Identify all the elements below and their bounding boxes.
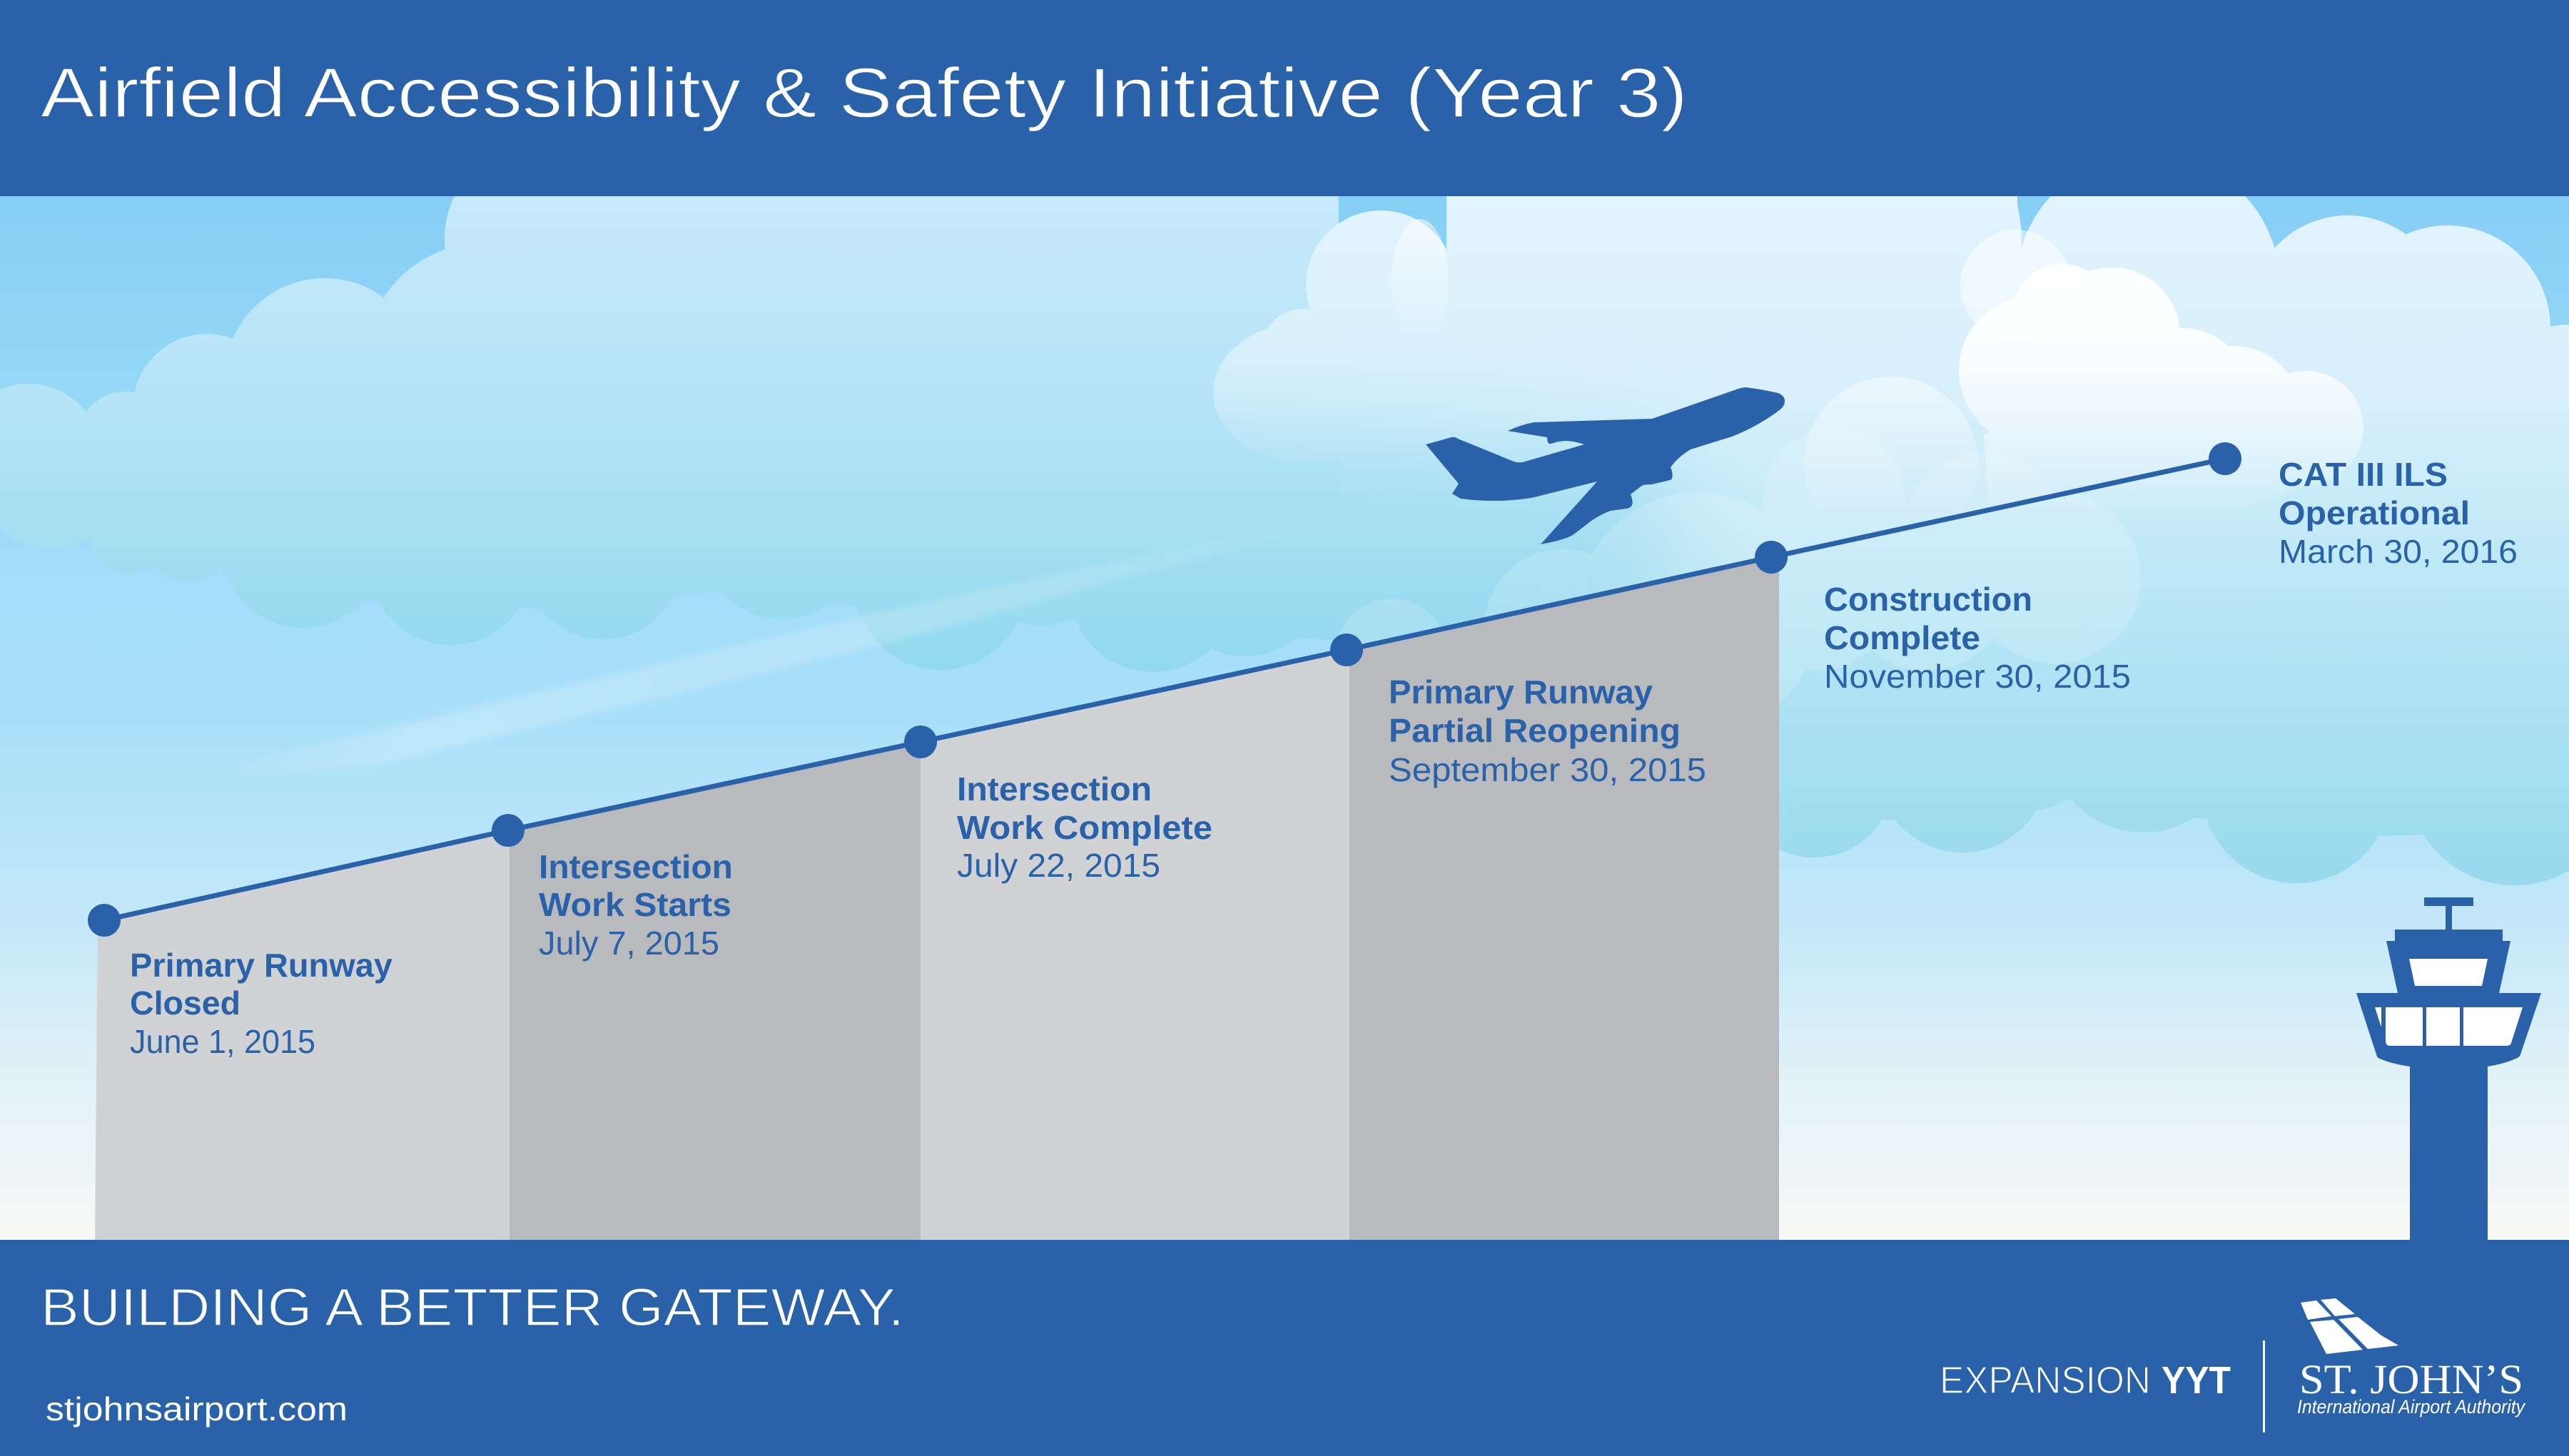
milestone: Intersection Work Starts xyxy=(539,848,733,962)
logo: St. John's airport authority: International Airport Authority xyxy=(2297,1396,2525,1417)
cloud: large right xyxy=(1213,196,2569,885)
logo: St. John's airport authority: ST. JOHN’S xyxy=(2299,1356,2523,1402)
milestone: Primary Runway Closed: Primary Runway xyxy=(130,947,392,984)
milestone: Construction Complete: Construction xyxy=(1824,581,2032,618)
sky background xyxy=(0,196,2569,1240)
cloud: white front xyxy=(1959,264,2363,494)
timeline line xyxy=(104,459,2225,920)
airplane silhouette xyxy=(1426,387,1785,544)
column 1 xyxy=(95,830,510,1240)
milestone: CAT III ILS Operational xyxy=(2279,456,2518,570)
control tower xyxy=(2356,897,2541,1240)
column 3 xyxy=(921,650,1349,1240)
cloud: translucent lower xyxy=(1334,428,2141,735)
milestone: CAT III ILS Operational: March 30, 2016 xyxy=(2279,533,2518,570)
website: stjohnsairport.com xyxy=(46,1390,348,1427)
logo: Expansion YYT: EXPANSION xyxy=(1940,1359,2151,1402)
footer band xyxy=(0,1240,2569,1456)
timeline xyxy=(88,442,2241,937)
milestone: Construction Complete: Complete xyxy=(1824,619,1980,656)
tagline: BUILDING A BETTER GATEWAY. xyxy=(41,1278,904,1337)
milestone: Intersection Work Complete: July 22, 2015 xyxy=(957,847,1160,884)
logo divider xyxy=(2263,1340,2265,1432)
columns under timeline xyxy=(95,556,1779,1240)
milestone: Construction Complete: November 30, 2015 xyxy=(1824,658,2131,695)
milestone: Primary Runway Closed xyxy=(130,947,392,1060)
milestone: Primary Runway Partial Reopening: September 30, 2015 xyxy=(1389,751,1706,788)
logo: St. John's airport authority xyxy=(2297,1298,2525,1417)
milestone: Primary Runway Partial Reopening: Partial Reopening xyxy=(1389,712,1681,749)
cloud highlight: top lobe xyxy=(1392,219,1449,345)
icon: runway xyxy=(2301,1298,2398,1354)
column 2 xyxy=(510,742,921,1240)
milestone: Intersection Work Complete: Intersection xyxy=(957,770,1152,808)
milestone dots xyxy=(88,442,2241,937)
milestone: CAT III ILS Operational: Operational xyxy=(2279,494,2470,531)
milestone: Primary Runway Closed: June 1, 2015 xyxy=(130,1023,315,1060)
tower body xyxy=(2356,897,2541,1240)
milestone: Intersection Work Complete xyxy=(957,770,1212,884)
header band xyxy=(0,0,2569,196)
milestone: Primary Runway Closed: Closed xyxy=(130,984,240,1022)
cloud: white soft upper lobe xyxy=(1960,230,2072,341)
milestone: Intersection Work Starts: Work Starts xyxy=(539,886,731,923)
lower windows xyxy=(2375,1007,2523,1046)
milestone: Intersection Work Starts: July 7, 2015 xyxy=(539,925,719,962)
milestone: Primary Runway Partial Reopening xyxy=(1389,673,1706,788)
cloud: large left xyxy=(0,141,1784,672)
title: Airfield Accessibility & Safety Initiative (Year 3) xyxy=(41,54,1688,132)
upper window xyxy=(2409,959,2488,986)
milestone: Primary Runway Partial Reopening: Primary Runway xyxy=(1389,673,1653,711)
column 4 xyxy=(1349,556,1779,1240)
milestone: Intersection Work Starts: Intersection xyxy=(539,848,733,885)
cloud: white soft left lobe xyxy=(1804,377,1978,551)
milestone: Construction Complete xyxy=(1824,581,2131,695)
logo: Expansion YYT: YYT xyxy=(2162,1359,2231,1402)
milestone: CAT III ILS Operational: CAT III ILS xyxy=(2279,456,2448,493)
milestone: Intersection Work Complete: Work Complete xyxy=(957,809,1212,846)
contrail xyxy=(178,496,1427,778)
